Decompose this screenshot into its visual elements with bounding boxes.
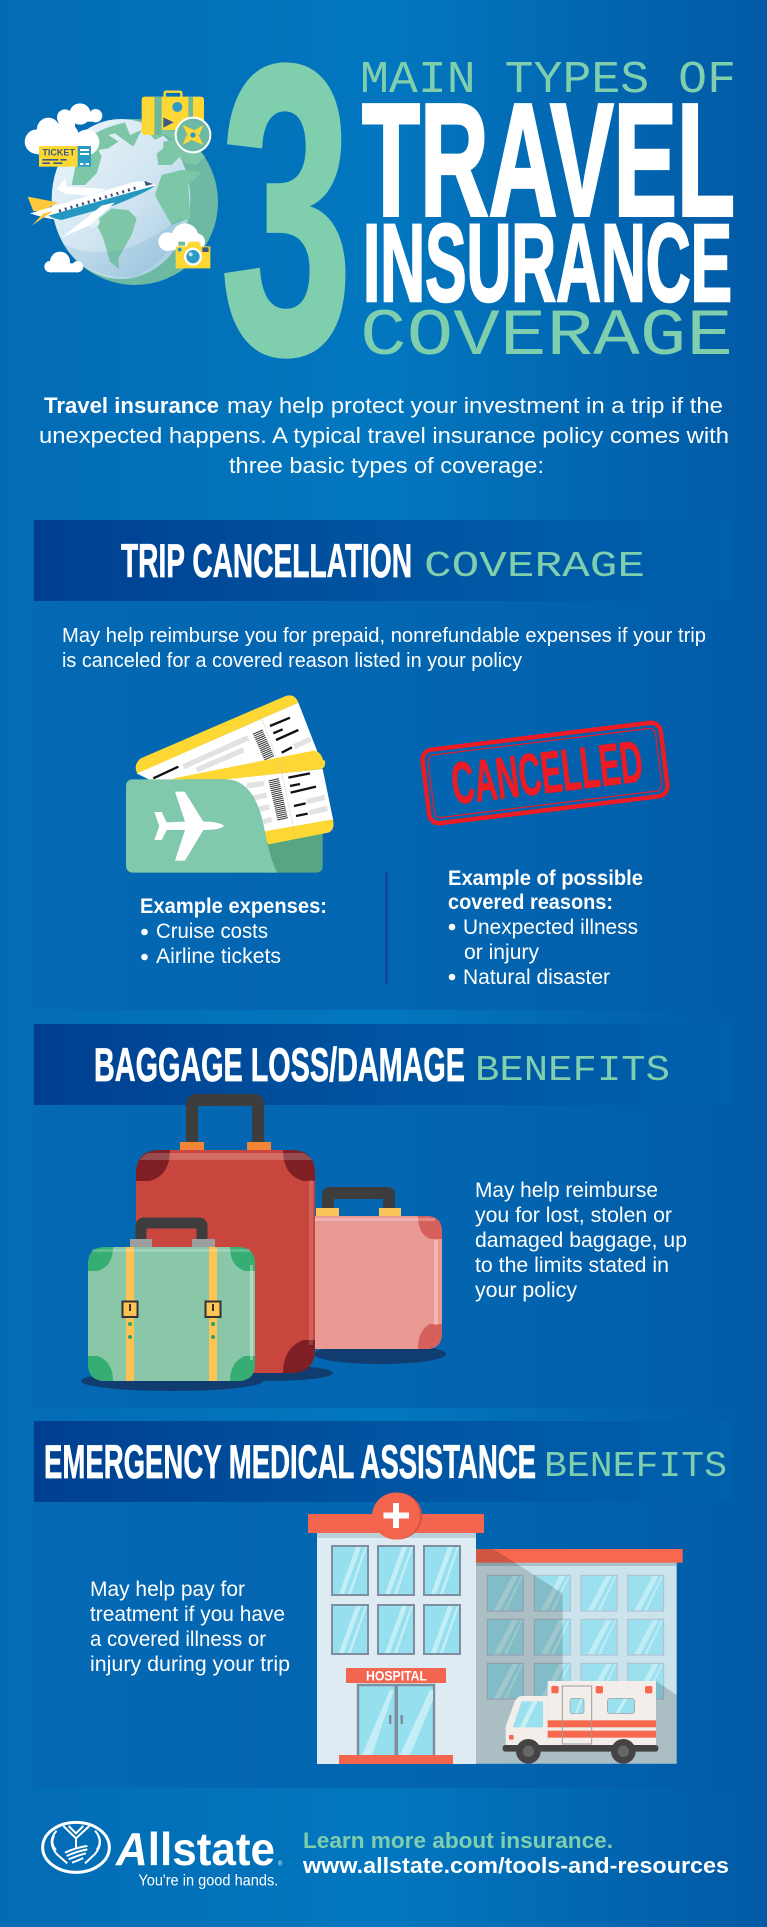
icon: globe with plane and travel items [25, 92, 218, 285]
panel: emergency medical assistance benefits [34, 1421, 734, 1788]
description text: you for lost, stolen or [475, 1204, 672, 1227]
back of wallet [263, 833, 323, 873]
description text [90, 1578, 290, 1676]
list: example covered reasons: Natural disaster [463, 966, 610, 989]
description text: injury during your trip [90, 1653, 290, 1676]
logo mark: good hands [43, 1822, 109, 1872]
logo: allstate [43, 1822, 283, 1889]
description text: May help reimburse [475, 1179, 658, 1202]
heading band: emergency medical assistance: BENEFITS [544, 1446, 727, 1487]
icon: luggage group [81, 1100, 446, 1391]
description text: May help reimburse you for prepaid, nonrefundable expenses if your trip [62, 624, 706, 647]
description text: damaged baggage, up [475, 1229, 687, 1252]
illustration: hospital [308, 1492, 683, 1764]
stamp: cancelled [421, 722, 669, 824]
icon: airplane [28, 178, 156, 238]
list: example covered reasons: Unexpected illness [463, 916, 638, 939]
wallet front [126, 779, 277, 873]
intro paragraph: unexpected happens. A typical travel insurance policy comes with [39, 423, 729, 448]
icon: camera [176, 242, 210, 268]
green suitcase [88, 1223, 255, 1381]
description text: treatment if you have [90, 1603, 285, 1626]
intro paragraph: Travel insurance [44, 393, 219, 418]
hospital doors [358, 1685, 434, 1757]
icon: white plane [154, 792, 224, 861]
heading band: baggage loss/damage [34, 1024, 734, 1105]
pink suitcase [310, 1193, 442, 1349]
front ticket [173, 751, 334, 844]
hospital sign: HOSPITAL [366, 1668, 427, 1684]
list: example expenses: Example expenses: [140, 895, 327, 918]
side wing of hospital [476, 1549, 683, 1764]
icon: bottom cloud [44, 252, 83, 272]
list: example covered reasons: covered reasons: [448, 891, 613, 914]
icon: airline tickets in wallet [126, 695, 334, 873]
globe [52, 119, 218, 285]
description text [62, 624, 706, 672]
icon: large cloud [25, 103, 102, 155]
list: example expenses [140, 895, 327, 968]
hospital emblem: cross [372, 1492, 422, 1540]
description text: a covered illness or [90, 1628, 266, 1651]
icon: suitcase [142, 92, 204, 135]
luggage shadows [81, 1344, 446, 1391]
title line: main types of: MAIN TYPES OF [360, 55, 736, 106]
call to action: Learn more about insurance. [303, 1828, 613, 1853]
list: example expenses: Airline tickets [156, 945, 281, 968]
icon: ticket: TICKET [42, 148, 76, 158]
description text: May help pay for [90, 1578, 245, 1601]
heading band: baggage loss/damage: BAGGAGE LOSS/DAMAGE [94, 1038, 465, 1091]
list: example covered reasons [448, 867, 643, 989]
divider line [385, 872, 388, 984]
intro paragraph [39, 393, 729, 478]
title: 3 main types of travel insurance coverage [220, 0, 736, 440]
logo: allstate: Allstate [115, 1823, 275, 1875]
heading band: emergency medical assistance [34, 1421, 734, 1502]
list: example expenses: Cruise costs [156, 920, 268, 943]
hospital sign [346, 1668, 446, 1684]
footer [43, 1822, 729, 1889]
logo: allstate: You're in good hands. [138, 1872, 278, 1889]
icon: small cloud [158, 223, 205, 251]
description text: to the limits stated in [475, 1254, 669, 1277]
back ticket [136, 695, 325, 783]
description text: is canceled for a covered reason listed in your policy [62, 649, 523, 672]
list: example covered reasons: or injury [464, 941, 539, 964]
call to action [302, 1828, 729, 1878]
panel: trip cancellation coverage [34, 520, 734, 1010]
title line: coverage: COVERAGE [360, 299, 733, 374]
heading band: trip cancellation: COVERAGE [424, 546, 645, 587]
red suitcase [136, 1100, 315, 1373]
intro paragraph: three basic types of coverage: [229, 453, 544, 478]
heading band: baggage loss/damage: BENEFITS [475, 1050, 670, 1091]
heading band: trip cancellation [34, 520, 734, 601]
heading band: trip cancellation: TRIP CANCELLATION [121, 534, 412, 587]
description text [475, 1179, 687, 1302]
icon: ticket [39, 146, 91, 167]
ambulance [503, 1681, 658, 1764]
intro paragraph: may help protect your investment in a trip if the [227, 393, 723, 418]
icon: compass [176, 118, 210, 152]
logo: allstate: ® [278, 1860, 283, 1867]
description text: your policy [475, 1279, 577, 1302]
panel: baggage loss/damage benefits [34, 1024, 734, 1408]
list: example covered reasons: Example of possible [448, 867, 643, 890]
call to action: www.allstate.com/tools-and-resources [302, 1853, 729, 1878]
main hospital building [308, 1492, 484, 1764]
